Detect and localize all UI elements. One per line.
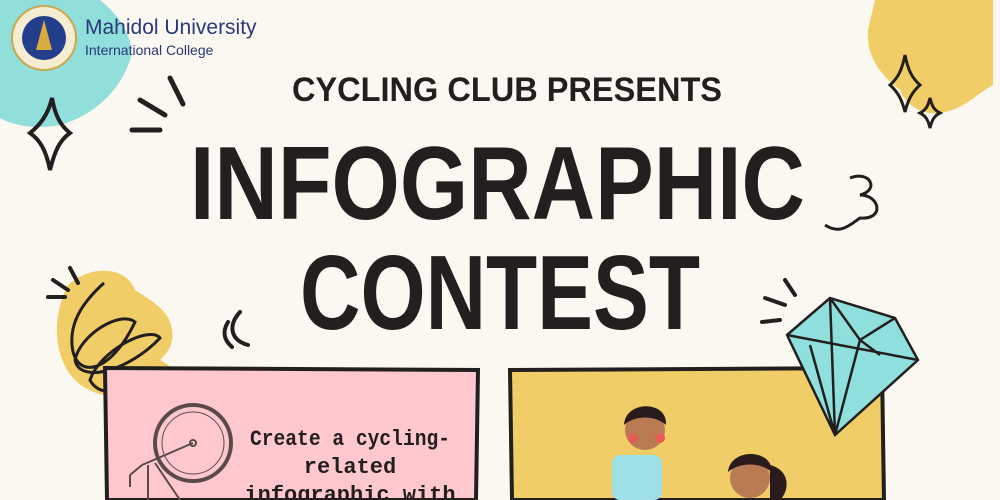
- icon: diamond: [787, 298, 918, 435]
- panel: yellow: [510, 368, 884, 500]
- blob: teal top-left: [0, 0, 131, 127]
- yellow blob left with squiggle: [57, 271, 177, 398]
- subtitle: CYCLING CLUB PRESENTS: [292, 71, 722, 109]
- logo text: [85, 16, 257, 58]
- text block: Create a cycling-: [250, 427, 450, 452]
- accent lines title: [132, 78, 183, 130]
- sparkle left: [30, 98, 70, 170]
- text block: [244, 427, 456, 500]
- sparkles right: [890, 55, 920, 112]
- logo text: International College: [85, 42, 214, 58]
- logo: [12, 6, 76, 70]
- title line 2: CONTEST: [300, 234, 700, 352]
- panel: pink: [105, 368, 478, 500]
- illustration: kids: [612, 406, 787, 500]
- blob: yellow top-right: [868, 0, 993, 113]
- title line 1: INFOGRAPHIC: [190, 126, 805, 242]
- swirl: [825, 176, 877, 229]
- text block: related: [304, 455, 396, 480]
- icon: bicycle wheel: [130, 405, 231, 500]
- logo text: Mahidol University: [85, 16, 257, 39]
